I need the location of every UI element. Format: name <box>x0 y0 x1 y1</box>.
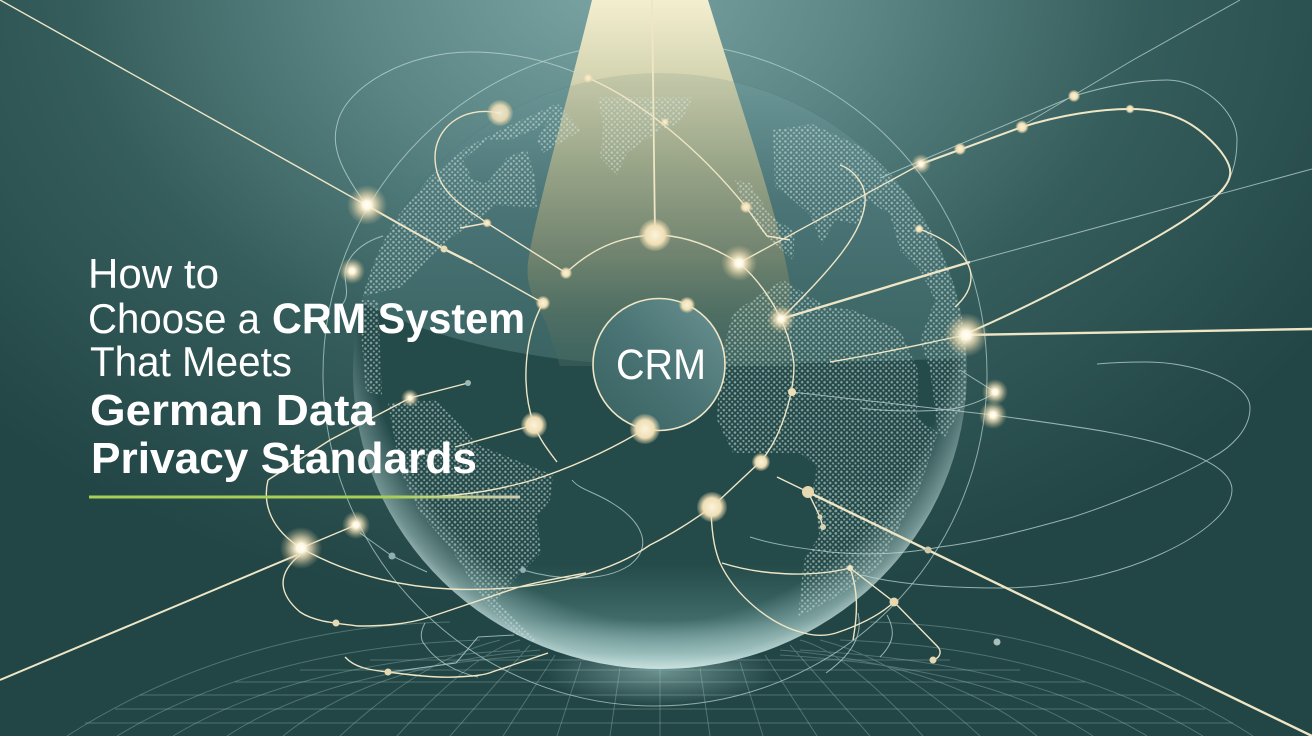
globe lit upper half <box>362 82 966 365</box>
continent in beam <box>598 97 693 175</box>
continent right rim <box>773 124 967 437</box>
glass globe <box>340 0 980 669</box>
globe rim highlight <box>353 73 967 669</box>
left rim strip <box>361 300 382 395</box>
thin connection lines <box>335 0 1312 677</box>
title block <box>88 250 525 483</box>
light beam <box>528 0 790 366</box>
dotted world map <box>358 97 967 643</box>
globe top edge seen through beam <box>532 73 779 238</box>
title line: CRM System: CRM System <box>272 295 525 343</box>
title line: How to: How to <box>88 250 219 297</box>
central east continent <box>717 280 938 540</box>
floor glow below sphere <box>545 638 775 706</box>
cream curved connection lines <box>0 0 971 677</box>
lower right continent <box>798 485 905 617</box>
title line: That Meets: That Meets <box>90 338 292 385</box>
title line: Privacy Standards: Privacy Standards <box>91 434 477 483</box>
island group upper left <box>537 103 582 153</box>
green title underline <box>89 496 520 498</box>
CRM label: CRM <box>616 341 706 389</box>
continent small lobe <box>735 180 795 260</box>
outer thin orbit ring <box>323 42 987 706</box>
title line: German Data: German Data <box>90 386 376 435</box>
title line: Choose a: Choose a <box>88 295 261 342</box>
perspective floor grid <box>67 622 1253 736</box>
lower left continent <box>388 400 553 643</box>
continent upper left <box>360 103 558 297</box>
central CRM circle <box>593 298 725 430</box>
glowing network nodes <box>280 73 1134 676</box>
